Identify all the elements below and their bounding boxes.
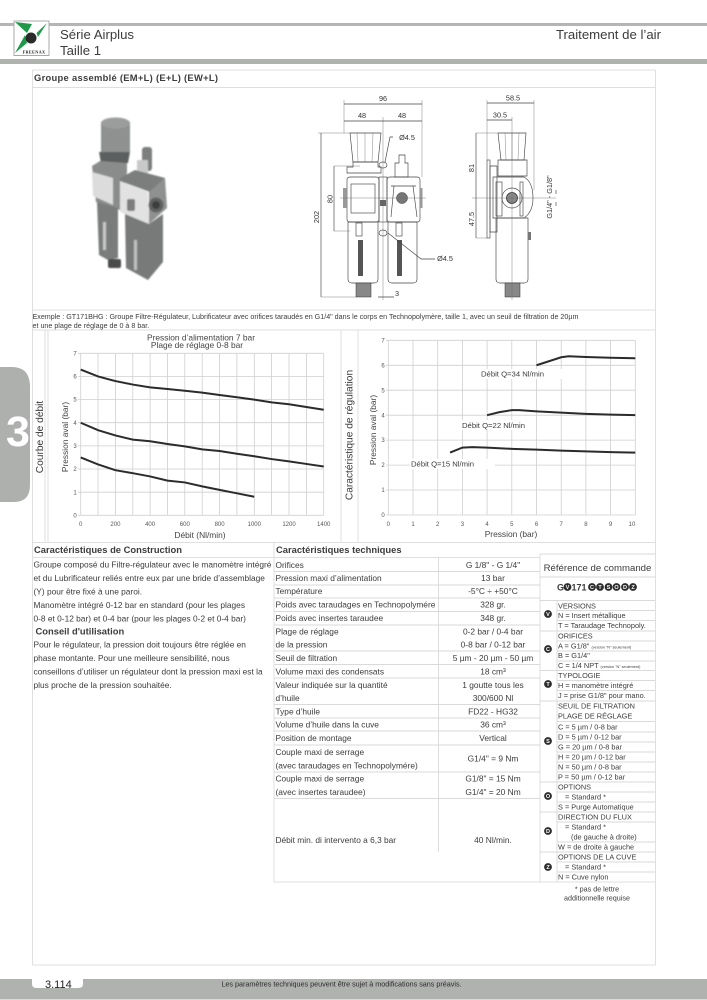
chart: regulation characteristic: 2 xyxy=(381,463,385,469)
table: order options: V xyxy=(546,612,550,618)
table: order options: OPTIONS xyxy=(558,782,591,792)
side label: regulation characteristic: Caractéristique de régulation xyxy=(344,370,356,500)
table: order options: N = Cuve nylon xyxy=(558,872,608,882)
table: order options: D = 5 µm / 0-12 bar xyxy=(558,732,622,742)
order code: D xyxy=(623,585,627,591)
table: technical characteristics: Vertical xyxy=(479,733,507,743)
table: order options: T xyxy=(546,682,550,688)
order code: Z xyxy=(631,585,635,591)
chart: flow curve: Plage de réglage 0-8 bar xyxy=(151,340,243,350)
chart: regulation characteristic: 3 xyxy=(381,438,385,444)
heading: construction characteristics: Caractéristiques de Construction xyxy=(34,544,182,555)
table: order options: = Standard * xyxy=(565,862,606,872)
side label: flow curve: Courbe de débit xyxy=(35,401,46,473)
table: order options: DIRECTION DU FLUX xyxy=(558,812,632,822)
chart: regulation characteristic: Débit Q=34 Nl/min xyxy=(481,370,544,378)
technical drawing: side view: 58.5 xyxy=(506,94,520,102)
chart: flow curve xyxy=(60,332,331,540)
table: technical characteristics: Débit min. di intervento a 6,3 bar xyxy=(276,835,396,845)
technical drawing: front view: 202 xyxy=(312,211,321,223)
text block: construction: (Y) pour être fixé à une paroi. xyxy=(34,586,142,596)
chart: flow curve: 5 xyxy=(73,398,77,404)
table: technical characteristics: (avec taraudages en Technopolymére) xyxy=(276,760,418,770)
table: technical characteristics: 36 cm³ xyxy=(480,720,506,730)
table: order options: H = manomètre intégré xyxy=(558,681,633,690)
chart: regulation characteristic: 7 xyxy=(381,338,385,344)
logo: Freenax: FREENAX xyxy=(23,50,46,54)
chart: regulation characteristic: 0 xyxy=(381,513,385,519)
table: technical characteristics: FD22 - HG32 xyxy=(468,706,518,716)
table: order options xyxy=(540,554,655,882)
technical drawing: side view: G1/4" - G1/8" xyxy=(545,175,554,219)
text block: construction: Groupe composé du Filtre-régulateur avec le manomètre intégré xyxy=(34,560,272,570)
table: technical characteristics: Valeur indiquée sur la quantité xyxy=(276,680,388,690)
chart: regulation characteristic: 5 xyxy=(381,388,385,394)
chart: regulation characteristic: 2 xyxy=(436,522,440,528)
footer note: Les paramètres techniques peuvent être sujet à modifications sans préavis. xyxy=(221,980,462,988)
chart: regulation characteristic: 8 xyxy=(584,522,588,528)
order code: T xyxy=(598,585,602,591)
table: order options: C = 1/4 NPT (version "N" seulement) xyxy=(558,661,641,670)
chart: flow curve: 400 xyxy=(145,522,156,528)
series title: Série Airplus xyxy=(60,27,134,42)
product photo xyxy=(92,118,167,280)
chart: flow curve: Débit (Nl/min) xyxy=(174,530,226,540)
chart: flow curve: Pression d’alimentation 7 bar xyxy=(147,332,255,342)
chart: flow curve: 600 xyxy=(180,522,190,528)
table: order options: N = 50 µm / 0-8 bar xyxy=(558,762,622,772)
technical drawing: side view: 47.5 xyxy=(467,212,476,226)
text block: construction: 0-8 et 0-12 bar) et 0-4 bar (pour les plages 0-2 et 0-4 bar) xyxy=(34,614,246,624)
text block: construction: Manomètre intégré 0-12 bar en standard (pour les plages xyxy=(34,600,245,610)
chart: regulation characteristic: Débit Q=22 Nl/min xyxy=(462,421,525,430)
table: order options: ORIFICES xyxy=(558,632,593,640)
table: technical characteristics xyxy=(274,558,540,852)
order code: V xyxy=(566,585,570,591)
table: order options: SEUIL DE FILTRATION xyxy=(558,702,635,710)
chart: flow curve: 3 xyxy=(73,444,77,450)
heading: technical characteristics: Caractéristiques techniques xyxy=(276,544,402,555)
series title xyxy=(60,27,134,58)
order code: 171 xyxy=(572,582,587,592)
text block: construction: et du Lubrificateur reliés entre eux par une bride d’assemblage xyxy=(34,573,265,583)
text block: construction xyxy=(34,560,272,624)
order code: O xyxy=(614,585,619,591)
table: technical characteristics: -5°C ÷ +50°C xyxy=(468,586,518,596)
table: technical characteristics: G1/4" = 9 Nm xyxy=(468,754,518,764)
chart: flow curve: 6 xyxy=(73,374,77,380)
footnote xyxy=(564,884,630,902)
technical drawing: front view: Ø4.5 xyxy=(437,254,453,263)
table: order options: = Standard * xyxy=(565,792,606,802)
table: technical characteristics: Température xyxy=(276,586,323,596)
chart: regulation characteristic: Débit Q=15 Nl/min xyxy=(411,460,474,468)
table: order options: TYPOLOGIE xyxy=(558,671,601,680)
table: technical characteristics: de la pression xyxy=(276,640,328,650)
table: order options: N = Insert métallique xyxy=(558,611,626,620)
table: technical characteristics: Pression maxi d’alimentation xyxy=(276,573,382,583)
table: order options: OPTIONS DE LA CUVE xyxy=(558,852,636,862)
example caption: Exemple : GT171BHG : Groupe Filtre-Régulateur, Lubrificateur avec orifices taraudés en G1/4" dans le corps en Technopolymère, taille 1, avec un seuil de filtration de 20µm xyxy=(32,313,578,321)
chart: regulation characteristic xyxy=(368,338,636,539)
table: technical characteristics: G1/4" = 20 Nm xyxy=(465,787,521,797)
chart: flow curve: 4 xyxy=(73,421,77,427)
order code: S xyxy=(607,585,611,591)
chart: flow curve: 2 xyxy=(73,467,77,473)
technical drawing: side view xyxy=(467,94,556,300)
table: technical characteristics: 0-2 bar / 0-4 bar xyxy=(463,626,523,636)
technical drawing: front view: Ø4.5 xyxy=(399,133,415,142)
example caption xyxy=(32,313,578,330)
technical drawing: front view: 3 xyxy=(395,289,399,298)
chart: regulation characteristic: Pression (bar) xyxy=(485,529,538,539)
table: technical characteristics: G1/8" = 15 Nm xyxy=(465,774,521,784)
heading: usage advice: Conseil d'utilisation xyxy=(36,626,124,636)
table: order options: J = prise G1/8" pour mano. xyxy=(558,691,646,700)
table: order options: S = Purge Automatique xyxy=(558,802,634,812)
chart: regulation characteristic: 6 xyxy=(381,364,385,370)
order code: G xyxy=(557,582,564,592)
chart: regulation characteristic: 1 xyxy=(381,488,385,494)
chart: flow curve: 1400 xyxy=(317,522,331,528)
technical drawing: front view: 80 xyxy=(326,195,334,203)
technical drawing: front view: 96 xyxy=(379,94,387,103)
chart: flow curve: 1200 xyxy=(282,522,296,528)
example caption: et une plage de réglage de 0 à 8 bar. xyxy=(32,322,149,330)
table: technical characteristics: Couple maxi de serrage xyxy=(276,774,364,784)
chart: regulation characteristic: 4 xyxy=(381,414,385,420)
technical drawing: front view: 48 xyxy=(358,111,366,120)
order code xyxy=(557,582,637,592)
chart: regulation characteristic: 9 xyxy=(609,522,613,528)
chart: flow curve: Pression aval (bar) xyxy=(60,402,70,472)
text block: usage advice: Pour le régulateur, la pression doit toujours être réglée en xyxy=(34,640,246,650)
table: order options: = Standard * xyxy=(565,822,606,832)
table: technical characteristics: d’huile xyxy=(276,693,300,703)
chart: regulation characteristic: 1 xyxy=(411,522,415,528)
technical drawing: side view: 30.5 xyxy=(493,110,507,120)
chart: regulation characteristic: 0 xyxy=(387,522,391,528)
table: technical characteristics: 40 Nl/min. xyxy=(474,835,512,845)
chart: regulation characteristic: 5 xyxy=(510,522,514,528)
chart: regulation characteristic: 4 xyxy=(485,522,489,528)
chart: regulation characteristic: Pression aval (bar) xyxy=(368,395,378,465)
chart: flow curve: 1000 xyxy=(248,522,262,528)
technical drawing: front view: 48 xyxy=(398,111,406,120)
footnote: * pas de lettre xyxy=(575,884,619,894)
table: technical characteristics: Seuil de filtration xyxy=(276,653,338,663)
chart: regulation characteristic: 10 xyxy=(629,522,636,528)
table: order options: B = G1/4" xyxy=(558,651,590,660)
footer band xyxy=(0,979,707,1000)
table: technical characteristics: 13 bar xyxy=(481,573,505,583)
logo: Freenax xyxy=(14,21,49,56)
table: order options: C = 5 µm / 0-8 bar xyxy=(558,722,618,732)
main panel frame xyxy=(32,70,656,965)
table: order options: Z xyxy=(546,865,550,871)
table: technical characteristics: 0-8 bar / 0-12 bar xyxy=(461,640,526,650)
table: order options: PLAGE DE RÉGLAGE xyxy=(558,712,632,720)
table: technical characteristics: 5 µm - 20 µm - 50 µm xyxy=(453,653,533,663)
heading: order reference: Référence de commande xyxy=(544,563,651,574)
table: technical characteristics: Plage de réglage xyxy=(276,626,339,636)
side tab: chapter 3: 3 xyxy=(6,408,30,456)
header bands xyxy=(0,23,707,64)
chart: flow curve: 800 xyxy=(215,522,225,528)
chart: flow curve: 0 xyxy=(73,514,77,520)
table: technical characteristics: 348 gr. xyxy=(480,613,506,623)
table: order options: D xyxy=(546,829,550,835)
table: order options: S xyxy=(546,739,550,745)
page number: 3.114 xyxy=(45,979,72,991)
table: technical characteristics: Volume d’huile dans la cuve xyxy=(276,720,379,730)
table: order options: P = 50 µm / 0-12 bar xyxy=(558,772,626,782)
table: order options: A = G1/8" (version "N" seulement) xyxy=(558,642,632,650)
table: technical characteristics: Position de montage xyxy=(276,733,352,743)
table: order options: O xyxy=(546,794,551,800)
chart: flow curve: 200 xyxy=(110,522,121,528)
text block: usage advice xyxy=(34,640,263,690)
chart: flow curve: 1 xyxy=(73,490,77,496)
table: technical characteristics: 300/600 Nl xyxy=(473,693,513,703)
order code: C xyxy=(590,585,594,591)
chart: regulation characteristic: 7 xyxy=(560,522,564,528)
table: technical characteristics: 328 gr. xyxy=(480,600,506,610)
table: technical characteristics: (avec insertes taraudee) xyxy=(276,787,366,797)
table: technical characteristics: Orifices xyxy=(276,560,304,570)
table: technical characteristics: G 1/8" - G 1/4" xyxy=(466,560,520,570)
chart: regulation characteristic: 3 xyxy=(461,522,465,528)
table: technical characteristics: Poids avec taraudages en Technopolymére xyxy=(276,600,436,610)
footnote: additionnelle requise xyxy=(564,894,630,902)
table: order options: W = de droite à gauche xyxy=(558,842,634,852)
technical drawing: front view xyxy=(312,94,453,300)
panel heading: assembled group: Groupe assemblé (EM+L) (E+L) (EW+L) xyxy=(34,72,218,83)
text block: usage advice: plus proche de la pression souhaitée. xyxy=(34,680,172,690)
chart: regulation characteristic: 6 xyxy=(535,522,539,528)
chart: flow curve: 0 xyxy=(79,522,83,528)
text block: usage advice: conseillons d’utiliser un régulateur dont la pression maxi est la xyxy=(34,666,263,676)
table: order options: H = 20 µm / 0-12 bar xyxy=(558,752,626,762)
table: technical characteristics: Volume maxi des condensats xyxy=(276,666,384,676)
section title: air treatment: Traitement de l’air xyxy=(556,27,662,42)
table: technical characteristics: Poids avec insertes taraudee xyxy=(276,613,383,623)
series title: Taille 1 xyxy=(60,43,101,58)
technical drawing: side view: 81 xyxy=(467,164,476,172)
table: order options: (de gauche à droite) xyxy=(571,832,637,842)
table: technical characteristics: Type d’huile xyxy=(276,706,320,716)
table: order options: G = 20 µm / 0-8 bar xyxy=(558,742,623,752)
table: order options: C xyxy=(546,647,550,653)
table: technical characteristics: Couple maxi de serrage xyxy=(276,747,364,757)
table: order options: VERSIONS xyxy=(558,602,596,610)
table: order options: T = Taraudage Technopoly. xyxy=(558,621,646,630)
table: technical characteristics: 18 cm³ xyxy=(480,666,506,676)
table: technical characteristics: 1 goutte tous les xyxy=(462,680,524,690)
chart: flow curve: 7 xyxy=(73,352,77,358)
side tab: chapter 3 xyxy=(0,367,30,502)
text block: usage advice: phase montante. Pour une meilleure sensibilité, nous xyxy=(34,653,230,663)
